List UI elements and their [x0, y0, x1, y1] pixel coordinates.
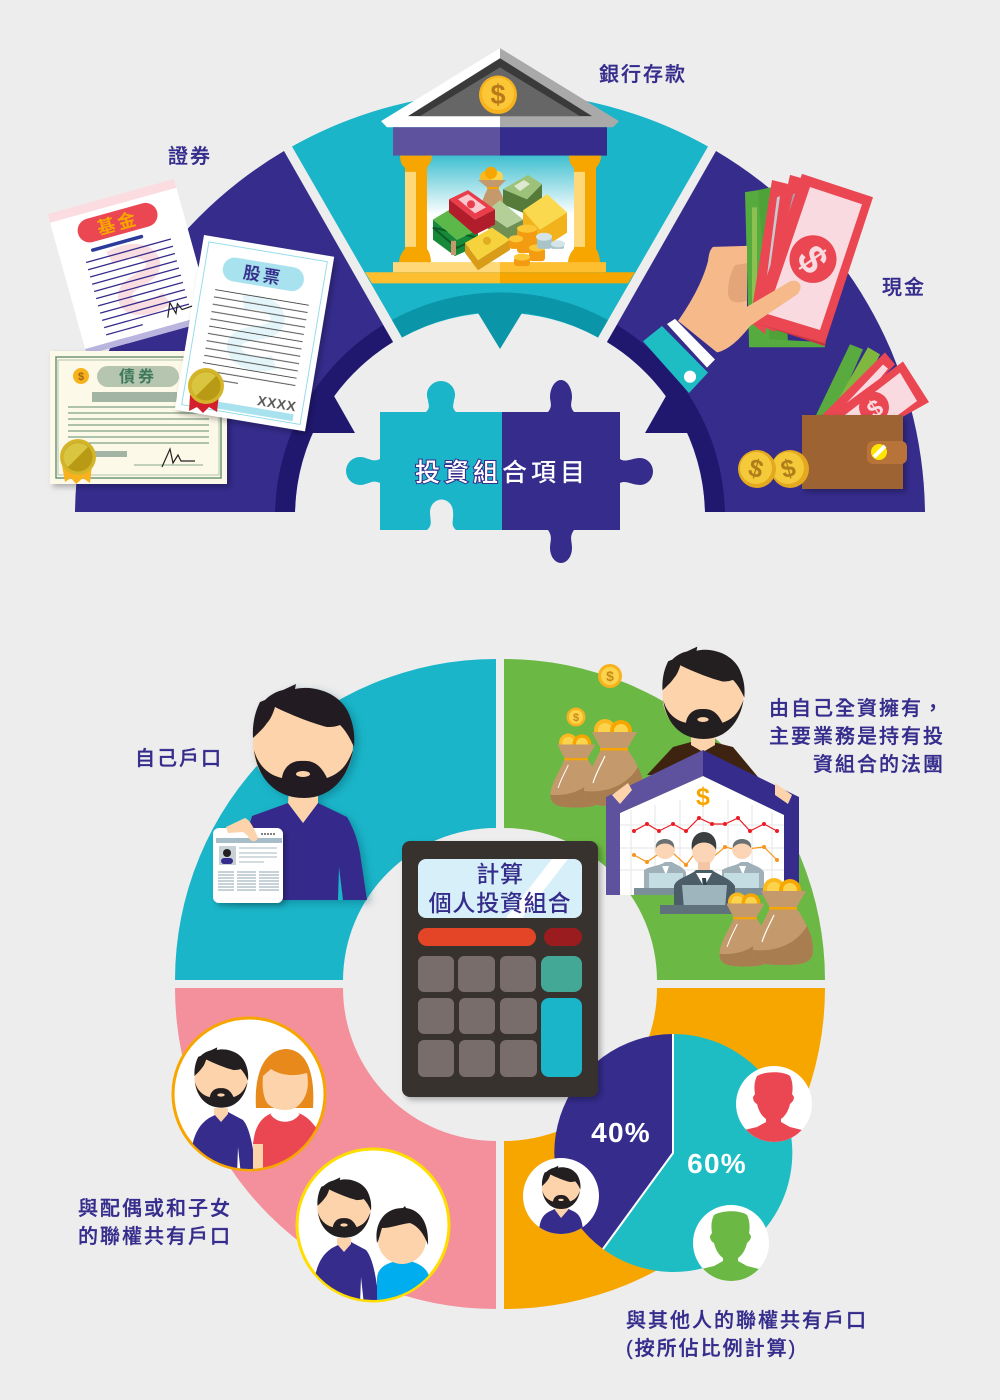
- segment: joint with others: [504, 988, 825, 1309]
- segment: joint with family: [175, 988, 496, 1309]
- coins: [738, 450, 809, 488]
- slice: 40%: [554, 1034, 673, 1249]
- inner band: cash: [607, 325, 725, 512]
- column: left: [399, 156, 432, 263]
- front red note: [751, 174, 873, 343]
- label: joint with spouse or children: 的聯權共有戶口: [78, 1225, 232, 1248]
- panel: investment portfolio items semicircle: [75, 92, 925, 512]
- medal: bond: [60, 439, 96, 484]
- green notes: [745, 185, 825, 347]
- illustration: bond certificate: 債券: [119, 367, 157, 386]
- man: [190, 1047, 256, 1175]
- column: right: [568, 156, 601, 263]
- label: joint with spouse or children: 與配偶或和子女: [78, 1197, 232, 1220]
- owner: [647, 647, 758, 777]
- segment: securities: [75, 151, 393, 512]
- coins falling: $: [606, 668, 614, 684]
- puzzle left piece: [346, 381, 502, 530]
- illustration: corporation owner and office: [78, 647, 945, 1360]
- label: corporation: [769, 697, 945, 776]
- illustration: bond certificate: $: [78, 371, 84, 383]
- label: joint with others: [626, 1309, 868, 1360]
- screen text: [429, 861, 571, 916]
- label: corporation: 資組合的法團: [813, 753, 945, 776]
- puzzle title: 投資組合項目: [415, 459, 589, 487]
- segment: bank deposit: [292, 92, 708, 338]
- wallet body: [802, 415, 907, 489]
- vault interior: [427, 156, 574, 263]
- hand: [678, 246, 801, 352]
- calculator screen: [418, 859, 582, 918]
- panel: calculation donut: [175, 659, 825, 1309]
- label: own account: 自己戶口: [135, 747, 223, 770]
- child: [376, 1206, 430, 1305]
- money bags upper: [550, 719, 644, 807]
- portrait circle: spouse: [173, 1018, 325, 1175]
- office frame: [606, 750, 799, 914]
- illustration: bank: [365, 48, 635, 283]
- back red notes: [750, 175, 826, 346]
- frieze: [393, 127, 607, 156]
- segment: own account: [175, 659, 496, 980]
- label: corporation: 由自己全資擁有，: [769, 697, 945, 720]
- base: [365, 262, 635, 283]
- illustration: stock document: XXXX: [256, 392, 298, 415]
- puzzle right piece: [502, 380, 653, 563]
- label: bank deposit: 銀行存款: [599, 63, 687, 86]
- coins falling: $: [573, 712, 579, 724]
- illustration: fund document: [48, 179, 213, 355]
- roof: [381, 48, 619, 127]
- hands: [612, 783, 792, 804]
- roof: $: [490, 79, 506, 110]
- illustration: man with account statement: [213, 684, 367, 903]
- pie chart: 40% and 60%: [554, 1034, 792, 1272]
- calculator keys: [418, 956, 537, 1077]
- illustration: hand holding cash: [643, 174, 873, 393]
- statement paper: [213, 818, 283, 903]
- cuff: [643, 319, 715, 393]
- slice: 60%: [603, 1034, 792, 1272]
- illustration: stock document: 股票: [242, 263, 284, 288]
- illustration: fund document: 基金: [95, 207, 141, 239]
- value: 60%: 60%: [687, 1148, 747, 1179]
- label: corporation: 主要業務是持有投: [769, 725, 945, 748]
- medal: stock: [188, 368, 224, 413]
- portrait circle: child: [297, 1149, 449, 1305]
- coins falling: [566, 664, 622, 726]
- label: joint with spouse or children: [78, 1197, 232, 1248]
- illustration: stock document: [175, 235, 334, 431]
- office frame: $: [696, 783, 710, 811]
- calculator: [402, 841, 598, 1097]
- illustration: wallet with notes and coins: [738, 344, 929, 489]
- money bags lower: [720, 878, 813, 966]
- silhouette: green co-owner: [693, 1205, 769, 1285]
- coins: $: [778, 454, 799, 484]
- inner band: bank deposit: [392, 292, 608, 349]
- value: 40%: 40%: [591, 1117, 651, 1148]
- notes: $: [862, 394, 889, 424]
- man: [313, 1177, 379, 1305]
- portrait: owner in pie chart: [523, 1158, 599, 1234]
- office staff: [634, 832, 764, 914]
- woman: [253, 1049, 318, 1175]
- chart lines: [632, 816, 779, 867]
- puzzle: investment portfolio items: [346, 380, 653, 563]
- front red note: $: [788, 237, 837, 282]
- calculator accent keys: [541, 956, 582, 1077]
- label: cash: 現金: [882, 276, 926, 299]
- calculator function bars: [418, 928, 582, 946]
- illustration: bond certificate: [50, 351, 227, 484]
- segment: corporation: [504, 659, 825, 980]
- money pile: [433, 167, 567, 270]
- screen text: 個人投資組合: [429, 890, 571, 916]
- label: joint with others: (按所佔比例計算): [626, 1337, 797, 1360]
- coins: $: [745, 454, 766, 484]
- label: securities: 證券: [168, 145, 212, 168]
- label: joint with others: 與其他人的聯權共有戶口: [626, 1309, 868, 1332]
- neck: [288, 790, 318, 823]
- screen text: 計算: [476, 861, 524, 887]
- body: [228, 803, 367, 900]
- notes: [815, 344, 929, 424]
- silhouette: red co-owner: [736, 1066, 812, 1146]
- inner band: securities: [275, 325, 393, 512]
- segment: cash: [607, 151, 925, 512]
